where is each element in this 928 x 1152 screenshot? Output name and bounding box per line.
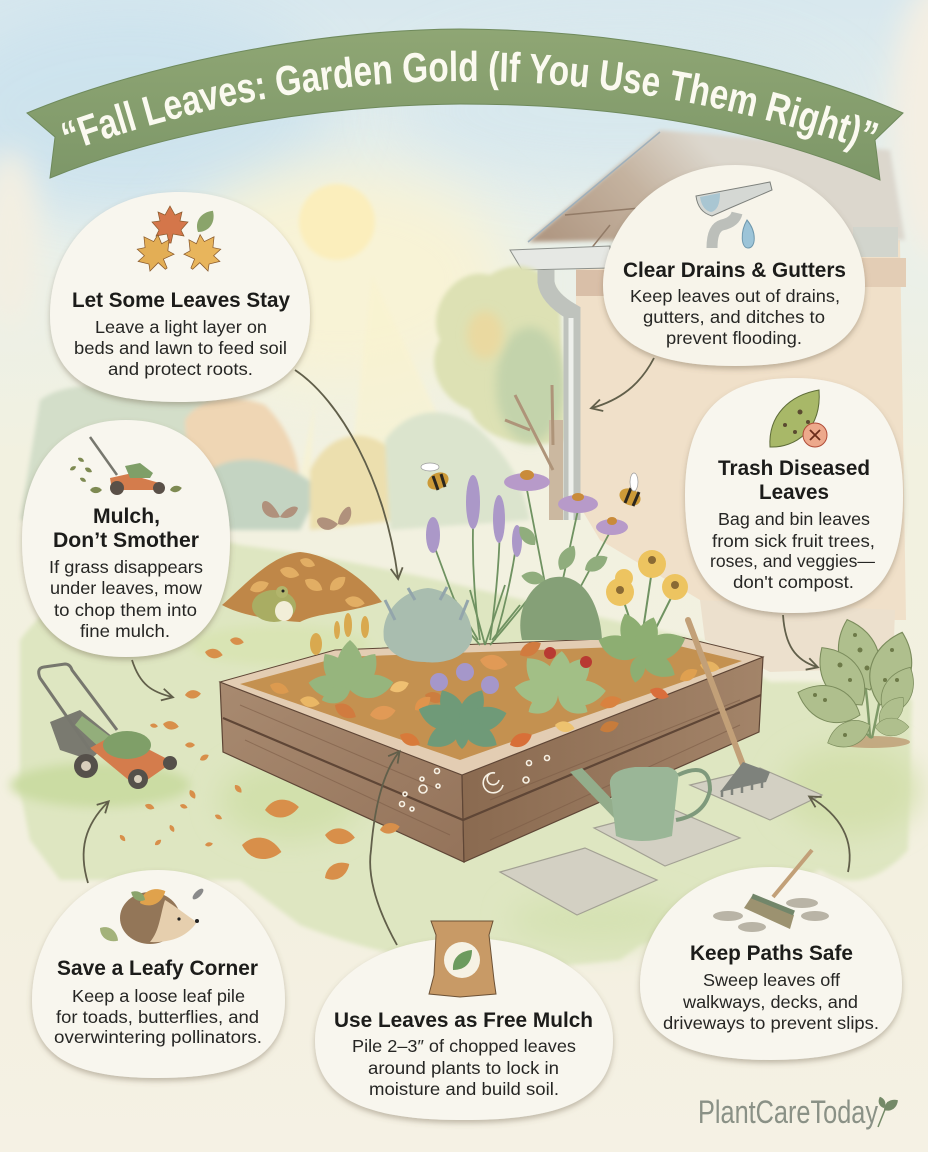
body: beds and lawn to feed soil	[74, 338, 287, 358]
body: driveways to prevent slips.	[663, 1013, 879, 1033]
body: to chop them into	[54, 600, 197, 620]
callout: keep paths safe	[640, 850, 902, 1060]
bubble	[50, 192, 310, 402]
heading: Don’t Smother	[53, 529, 199, 552]
body: from sick fruit trees,	[712, 531, 875, 551]
arrows	[84, 358, 850, 945]
body	[630, 286, 840, 348]
scattered lawn leaves	[118, 636, 401, 884]
body	[352, 1036, 576, 1099]
plants	[307, 470, 689, 754]
house	[510, 130, 906, 672]
sun	[299, 184, 375, 260]
body: Keep leaves out of drains,	[630, 286, 840, 306]
diseased plant	[792, 614, 923, 754]
body: gutters, and ditches to	[643, 307, 825, 327]
coneflowers	[504, 470, 628, 625]
icon: gutter and drop	[696, 182, 772, 248]
banner title text: “Fall Leaves: Garden Gold (If You Use Them Right)”	[62, 50, 878, 153]
body: walkways, decks, and	[682, 992, 858, 1012]
body	[663, 970, 879, 1033]
heading: Mulch,	[93, 505, 160, 528]
bed right face	[462, 657, 763, 862]
heading	[53, 505, 199, 552]
rake	[688, 620, 770, 797]
icon: diseased leaf	[770, 390, 827, 447]
icon: broom and stones	[713, 850, 829, 932]
gutter	[510, 246, 610, 270]
bubble	[603, 165, 865, 366]
brand logo: PlantCareToday	[698, 1094, 878, 1130]
body: prevent flooding.	[666, 328, 802, 348]
body	[49, 557, 203, 641]
callout: trash diseased leaves	[685, 378, 903, 613]
callout: use leaves as free mulch	[315, 921, 613, 1120]
banner ribbon	[27, 29, 903, 180]
paving stones	[500, 768, 822, 915]
bubble	[315, 938, 613, 1120]
body	[74, 317, 287, 379]
distant foliage	[20, 386, 530, 530]
yellow flowers plant	[595, 550, 689, 684]
body: moisture and build soil.	[369, 1079, 559, 1099]
icon: autumn leaves	[128, 206, 230, 279]
wall	[576, 240, 906, 620]
bubble	[22, 420, 230, 657]
body: under leaves, mow	[50, 578, 202, 598]
body: Bag and bin leaves	[718, 509, 870, 529]
body: don't compost.	[733, 572, 854, 592]
body	[54, 986, 262, 1047]
green herb bush	[520, 577, 602, 640]
raised garden bed	[220, 636, 763, 862]
body: Sweep leaves off	[703, 970, 840, 990]
icon: mulch bag	[429, 921, 496, 997]
body: and protect roots.	[108, 359, 253, 379]
front plant	[415, 663, 510, 754]
icon: small mower	[69, 437, 182, 495]
bees	[421, 463, 643, 509]
bubble	[685, 378, 903, 613]
soil holes	[400, 756, 550, 811]
body: roses, and veggies—	[710, 551, 875, 571]
body: Pile 2–3″ of chopped leaves	[352, 1036, 576, 1056]
heading: Save a Leafy Corner	[57, 957, 258, 980]
heading: Trash Diseased	[718, 457, 870, 480]
lawn mower	[39, 664, 177, 789]
bubble	[640, 867, 902, 1060]
body: Keep a loose leaf pile	[72, 986, 245, 1006]
left plant	[307, 613, 395, 708]
tree	[434, 266, 565, 520]
heading: Use Leaves as Free Mulch	[334, 1009, 593, 1032]
callout: save a leafy corner	[32, 870, 285, 1078]
title banner	[26, 28, 904, 181]
leaf pile with frog	[222, 552, 382, 622]
body: around plants to lock in	[368, 1058, 559, 1078]
butterflies	[262, 501, 351, 530]
lawn	[10, 541, 920, 967]
frog	[252, 586, 296, 622]
body: overwintering pollinators.	[54, 1027, 262, 1047]
heading: Leaves	[759, 481, 829, 504]
icon: hedgehog	[97, 885, 205, 945]
roof	[528, 130, 905, 242]
mulch leaves	[268, 638, 721, 751]
heading: Let Some Leaves Stay	[72, 289, 290, 312]
watering can	[570, 767, 710, 841]
body	[710, 509, 875, 592]
lavender	[426, 475, 535, 645]
body: If grass disappears	[49, 557, 203, 577]
callout: clear drains and gutters	[603, 165, 865, 366]
bubble	[32, 870, 285, 1078]
heading: Keep Paths Safe	[690, 942, 853, 965]
ladybug plant	[513, 647, 607, 720]
callout: mulch, don't smother	[22, 420, 230, 657]
callout: let some leaves stay	[50, 192, 310, 402]
body: fine mulch.	[80, 621, 170, 641]
bed left face	[220, 682, 464, 862]
heading	[718, 457, 870, 504]
downpipe	[546, 270, 572, 520]
heading: Clear Drains & Gutters	[623, 259, 846, 282]
body: for toads, butterflies, and	[56, 1007, 259, 1027]
silver bush	[384, 587, 472, 662]
body: Leave a light layer on	[95, 317, 267, 337]
bed soil and mulch	[220, 636, 763, 775]
logo sprig	[877, 1096, 900, 1127]
